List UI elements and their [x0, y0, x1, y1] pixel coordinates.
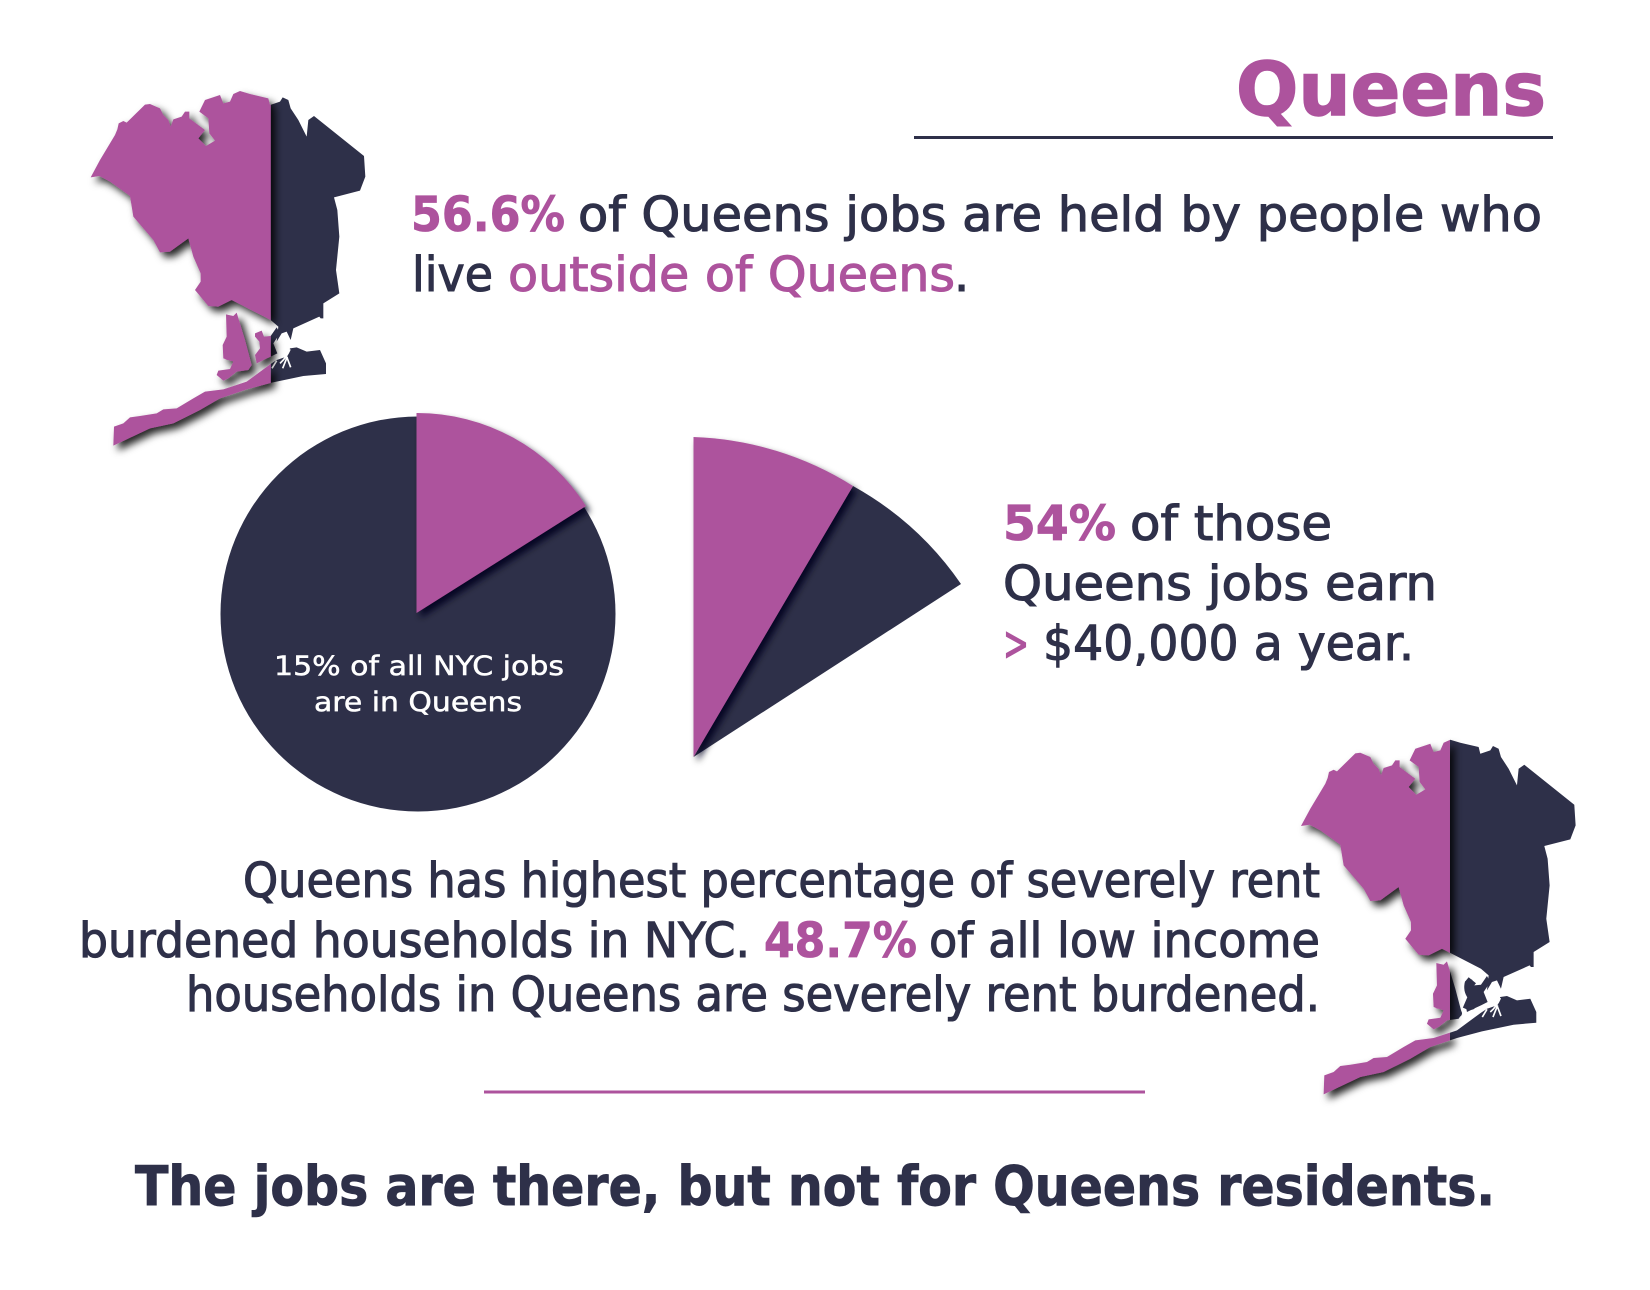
text: 54% of those jobs: > — [1003, 616, 1029, 672]
icon: Queens map split 56.6 percent — [91, 91, 365, 446]
text: 56.6% of Queens jobs: . — [954, 247, 969, 303]
pie wedge: 54% of those jobs — [694, 437, 961, 757]
text: severely rent burdened: households in Queens are severely rent burdened. — [186, 967, 1320, 1023]
pie label: are in Queens — [314, 687, 522, 718]
pie label: 15% of all NYC jobs — [274, 651, 564, 682]
text: severely rent burdened: of all low income — [929, 913, 1320, 969]
text: 56.6% of Queens jobs: 56.6% — [411, 187, 565, 243]
divider rule — [484, 1090, 1145, 1094]
text: 56.6% of Queens jobs — [411, 187, 1542, 303]
text: severely rent burdened: 48.7% — [764, 913, 917, 969]
text: 56.6% of Queens jobs: live — [412, 247, 493, 303]
conclusion: The jobs are there, but not for Queens residents. — [135, 1155, 1495, 1218]
title: Queens — [1236, 47, 1546, 133]
text: severely rent burdened — [79, 853, 1320, 1023]
text: severely rent burdened: Queens has highest percentage of severely rent — [243, 853, 1320, 909]
text: 54% of those jobs: of those — [1130, 496, 1332, 552]
text: 56.6% of Queens jobs: outside of Queens — [508, 247, 955, 303]
title underline — [914, 136, 1553, 139]
text: 56.6% of Queens jobs: of Queens jobs are held by people who — [578, 187, 1542, 243]
text: 54% of those jobs: Queens jobs earn — [1003, 556, 1437, 612]
text: 54% of those jobs: $40,000 a year. — [1043, 616, 1414, 672]
text: 54% of those jobs — [1003, 496, 1437, 672]
text: severely rent burdened: burdened households in NYC. — [79, 913, 750, 969]
pie label — [274, 651, 564, 718]
icon: Queens map split 48.7 percent — [1301, 740, 1576, 1094]
text: 54% of those jobs: 54% — [1003, 496, 1116, 552]
pie chart: 15% of NYC jobs — [220, 413, 616, 812]
